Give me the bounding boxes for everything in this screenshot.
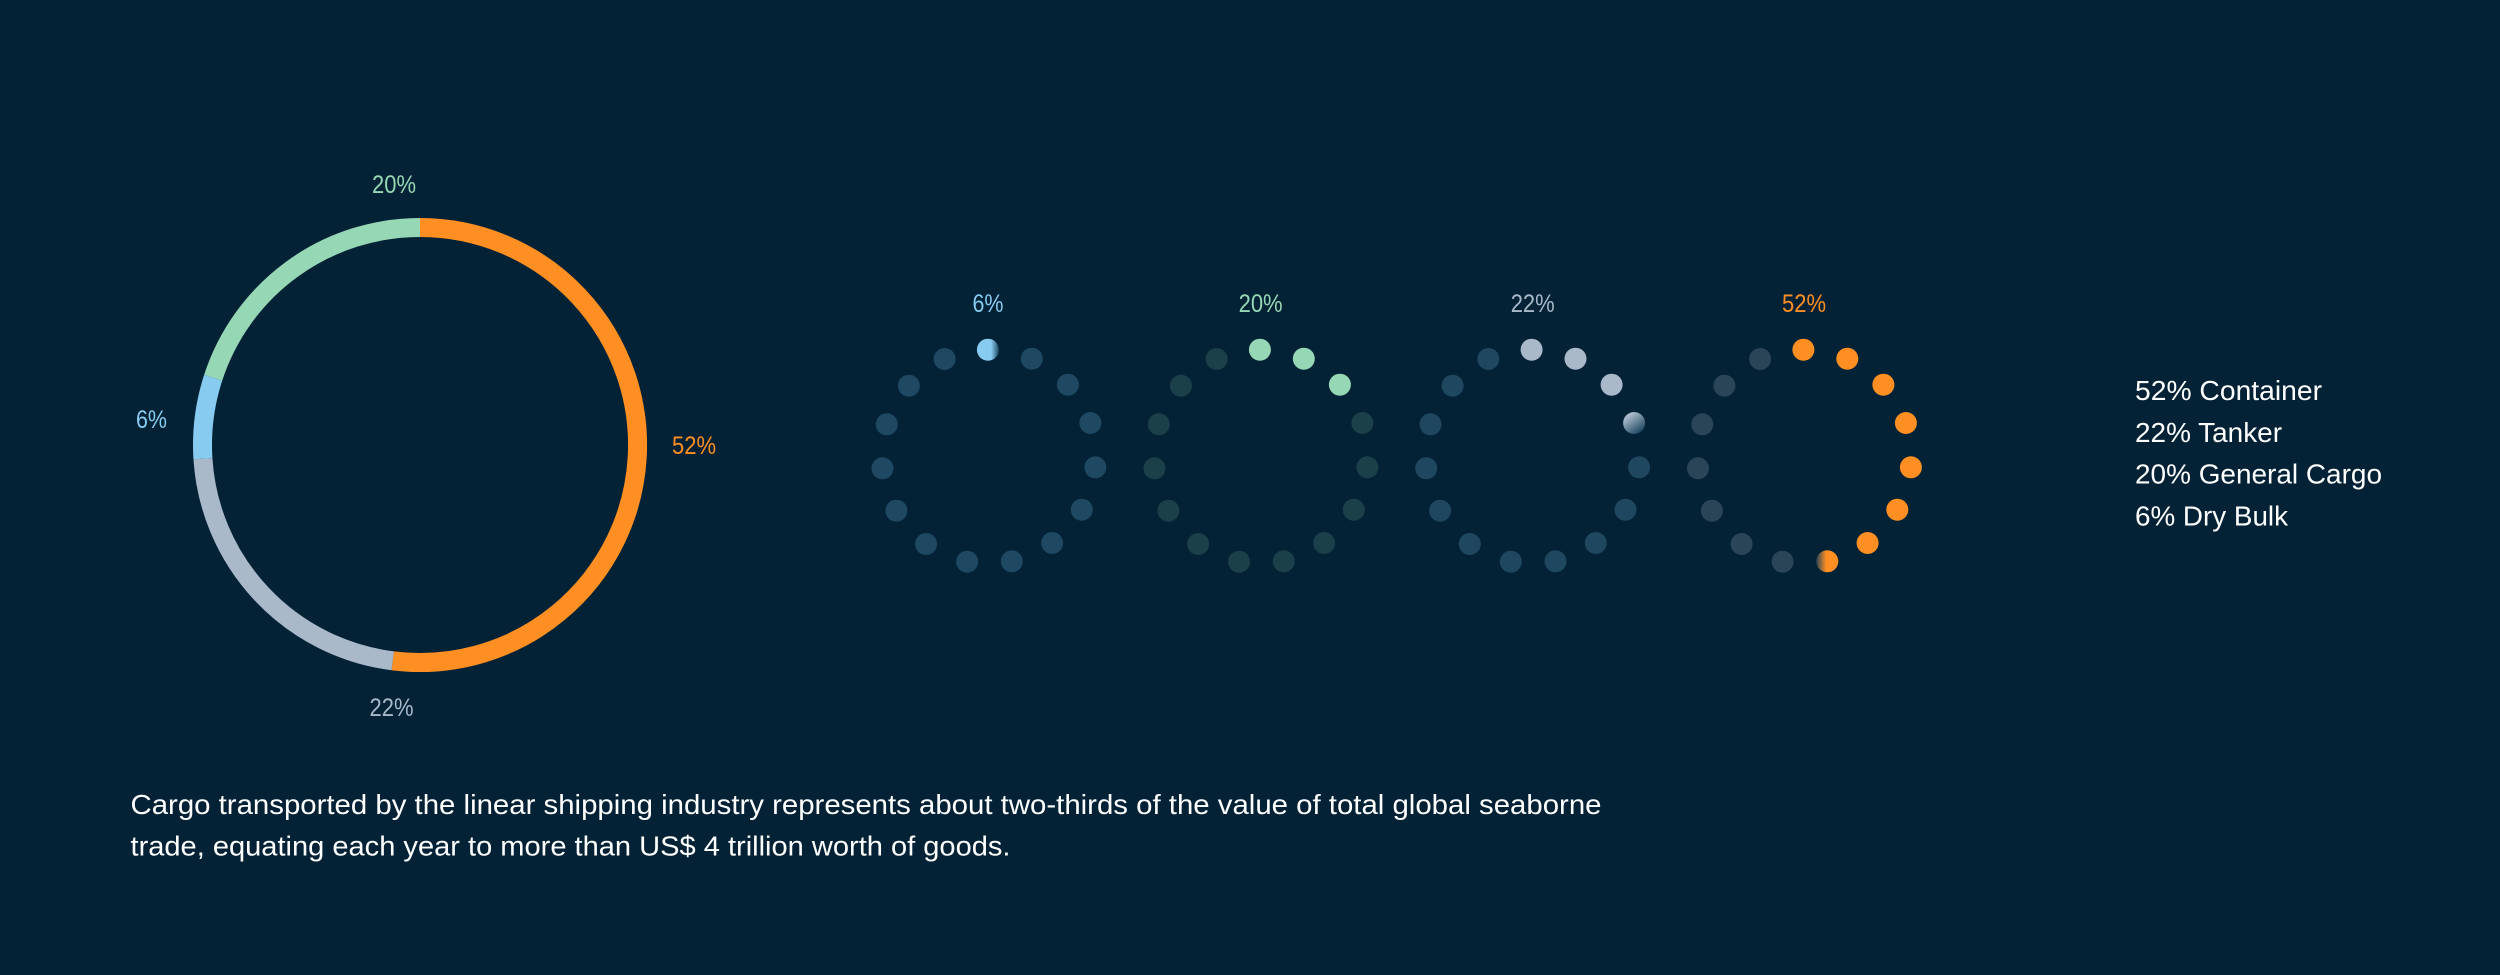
donut label: 52%: 52%	[672, 432, 716, 460]
segment: general cargo 20%	[213, 228, 420, 378]
dot ring label: 52%: 52%	[1782, 290, 1826, 318]
dot ring: 20% general cargo	[1144, 339, 1378, 573]
donut label: 20%: 20%	[372, 171, 416, 199]
legend	[2135, 375, 2382, 532]
dot ring label: 20%: 20%	[1239, 290, 1283, 318]
segment: container 52%	[393, 228, 638, 662]
dot ring label: 22%: 22%	[1511, 290, 1555, 318]
legend row: general cargo: 20% General Cargo	[2135, 458, 2382, 490]
segment: dry bulk 6%	[203, 378, 213, 459]
donut chart: cargo share	[203, 228, 638, 662]
dot ring: 52% container	[1687, 339, 1922, 573]
dot ring: 22% tanker	[1415, 339, 1650, 573]
legend row: dry bulk: 6% Dry Bulk	[2135, 500, 2289, 532]
legend row: tanker: 22% Tanker	[2135, 417, 2282, 448]
segment: tanker 22%	[203, 459, 393, 661]
donut label: 6%: 6%	[136, 406, 167, 434]
dot ring: 6% dry bulk	[872, 339, 1106, 573]
body text	[130, 789, 1602, 862]
dot ring label: 6%: 6%	[972, 290, 1004, 318]
legend row: container: 52% Container	[2135, 375, 2322, 406]
body text line 1: Cargo transported by the linear shipping industry represents about two-thirds of the value of total global seaborne	[130, 789, 1602, 820]
donut label: 22%: 22%	[370, 694, 414, 722]
body text line 2: trade, equating each year to more than US$ 4 trillion worth of goods.	[130, 830, 1010, 862]
